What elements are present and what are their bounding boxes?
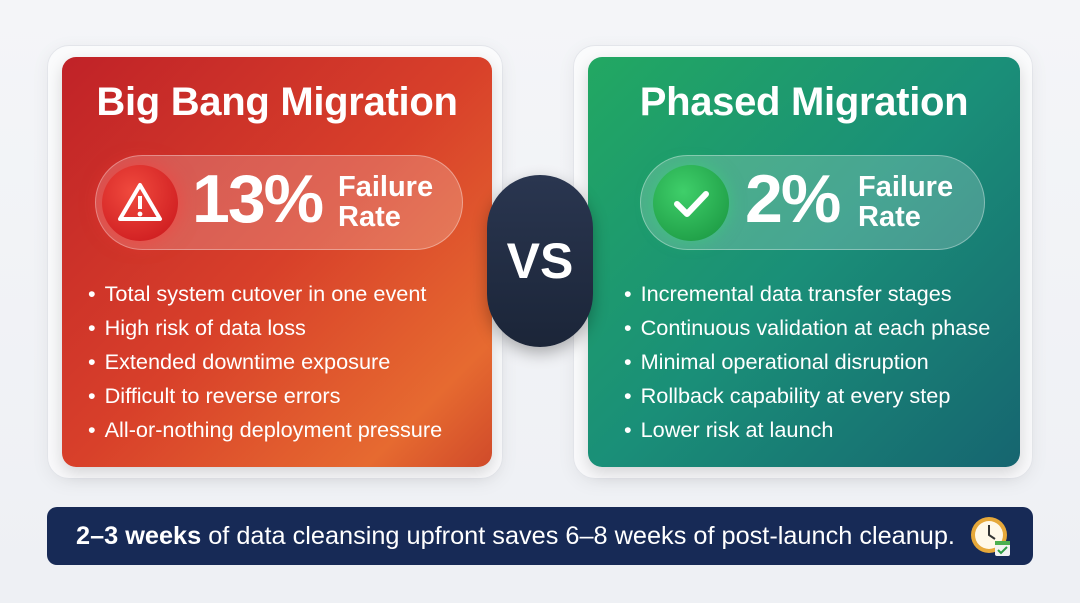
label: failure rate: Failure (858, 171, 953, 203)
list: big bang: Difficult to reverse errors (105, 383, 340, 408)
icon: check (653, 165, 729, 241)
list: big bang: All-or-nothing deployment pressure (105, 417, 442, 442)
list: big bang: Extended downtime exposure (105, 349, 390, 374)
list: phased: Rollback capability at every step (641, 383, 950, 408)
stat: 13%: 13% (192, 161, 322, 237)
list: phased: Lower risk at launch (641, 417, 833, 442)
list: phased: Incremental data transfer stages (641, 281, 952, 306)
stat: 2%: 2% (745, 161, 839, 237)
icon: clock (971, 517, 1010, 556)
VS badge (487, 175, 593, 347)
panel: phased outer (573, 45, 1033, 479)
label: failure rate (338, 171, 433, 233)
list: phased: Continuous validation at each phase (641, 315, 990, 340)
list: big bang: High risk of data loss (105, 315, 306, 340)
VS badge: VS (507, 233, 573, 289)
heading: phased: Phased Migration (640, 80, 968, 124)
stat pill: 13% (95, 155, 463, 250)
list: phased (624, 281, 990, 442)
list: big bang: Total system cutover in one event (105, 281, 426, 306)
panel: phased card (588, 57, 1020, 467)
list: phased: Minimal operational disruption (641, 349, 929, 374)
label: failure rate (858, 171, 953, 233)
stat pill: 2% (640, 155, 985, 250)
label: failure rate: Rate (858, 201, 921, 233)
label: failure rate: Rate (338, 201, 401, 233)
banner: callout (47, 507, 1033, 565)
list: big bang (88, 281, 442, 442)
panel: big bang card (62, 57, 492, 467)
label: failure rate: Failure (338, 171, 433, 203)
icon: warning (102, 165, 178, 241)
banner: callout: 2–3 weeks of data cleansing upfront saves 6–8 weeks of post-launch cleanup. (76, 522, 955, 550)
heading: big bang: Big Bang Migration (96, 80, 458, 124)
panel: big bang outer (47, 45, 503, 479)
